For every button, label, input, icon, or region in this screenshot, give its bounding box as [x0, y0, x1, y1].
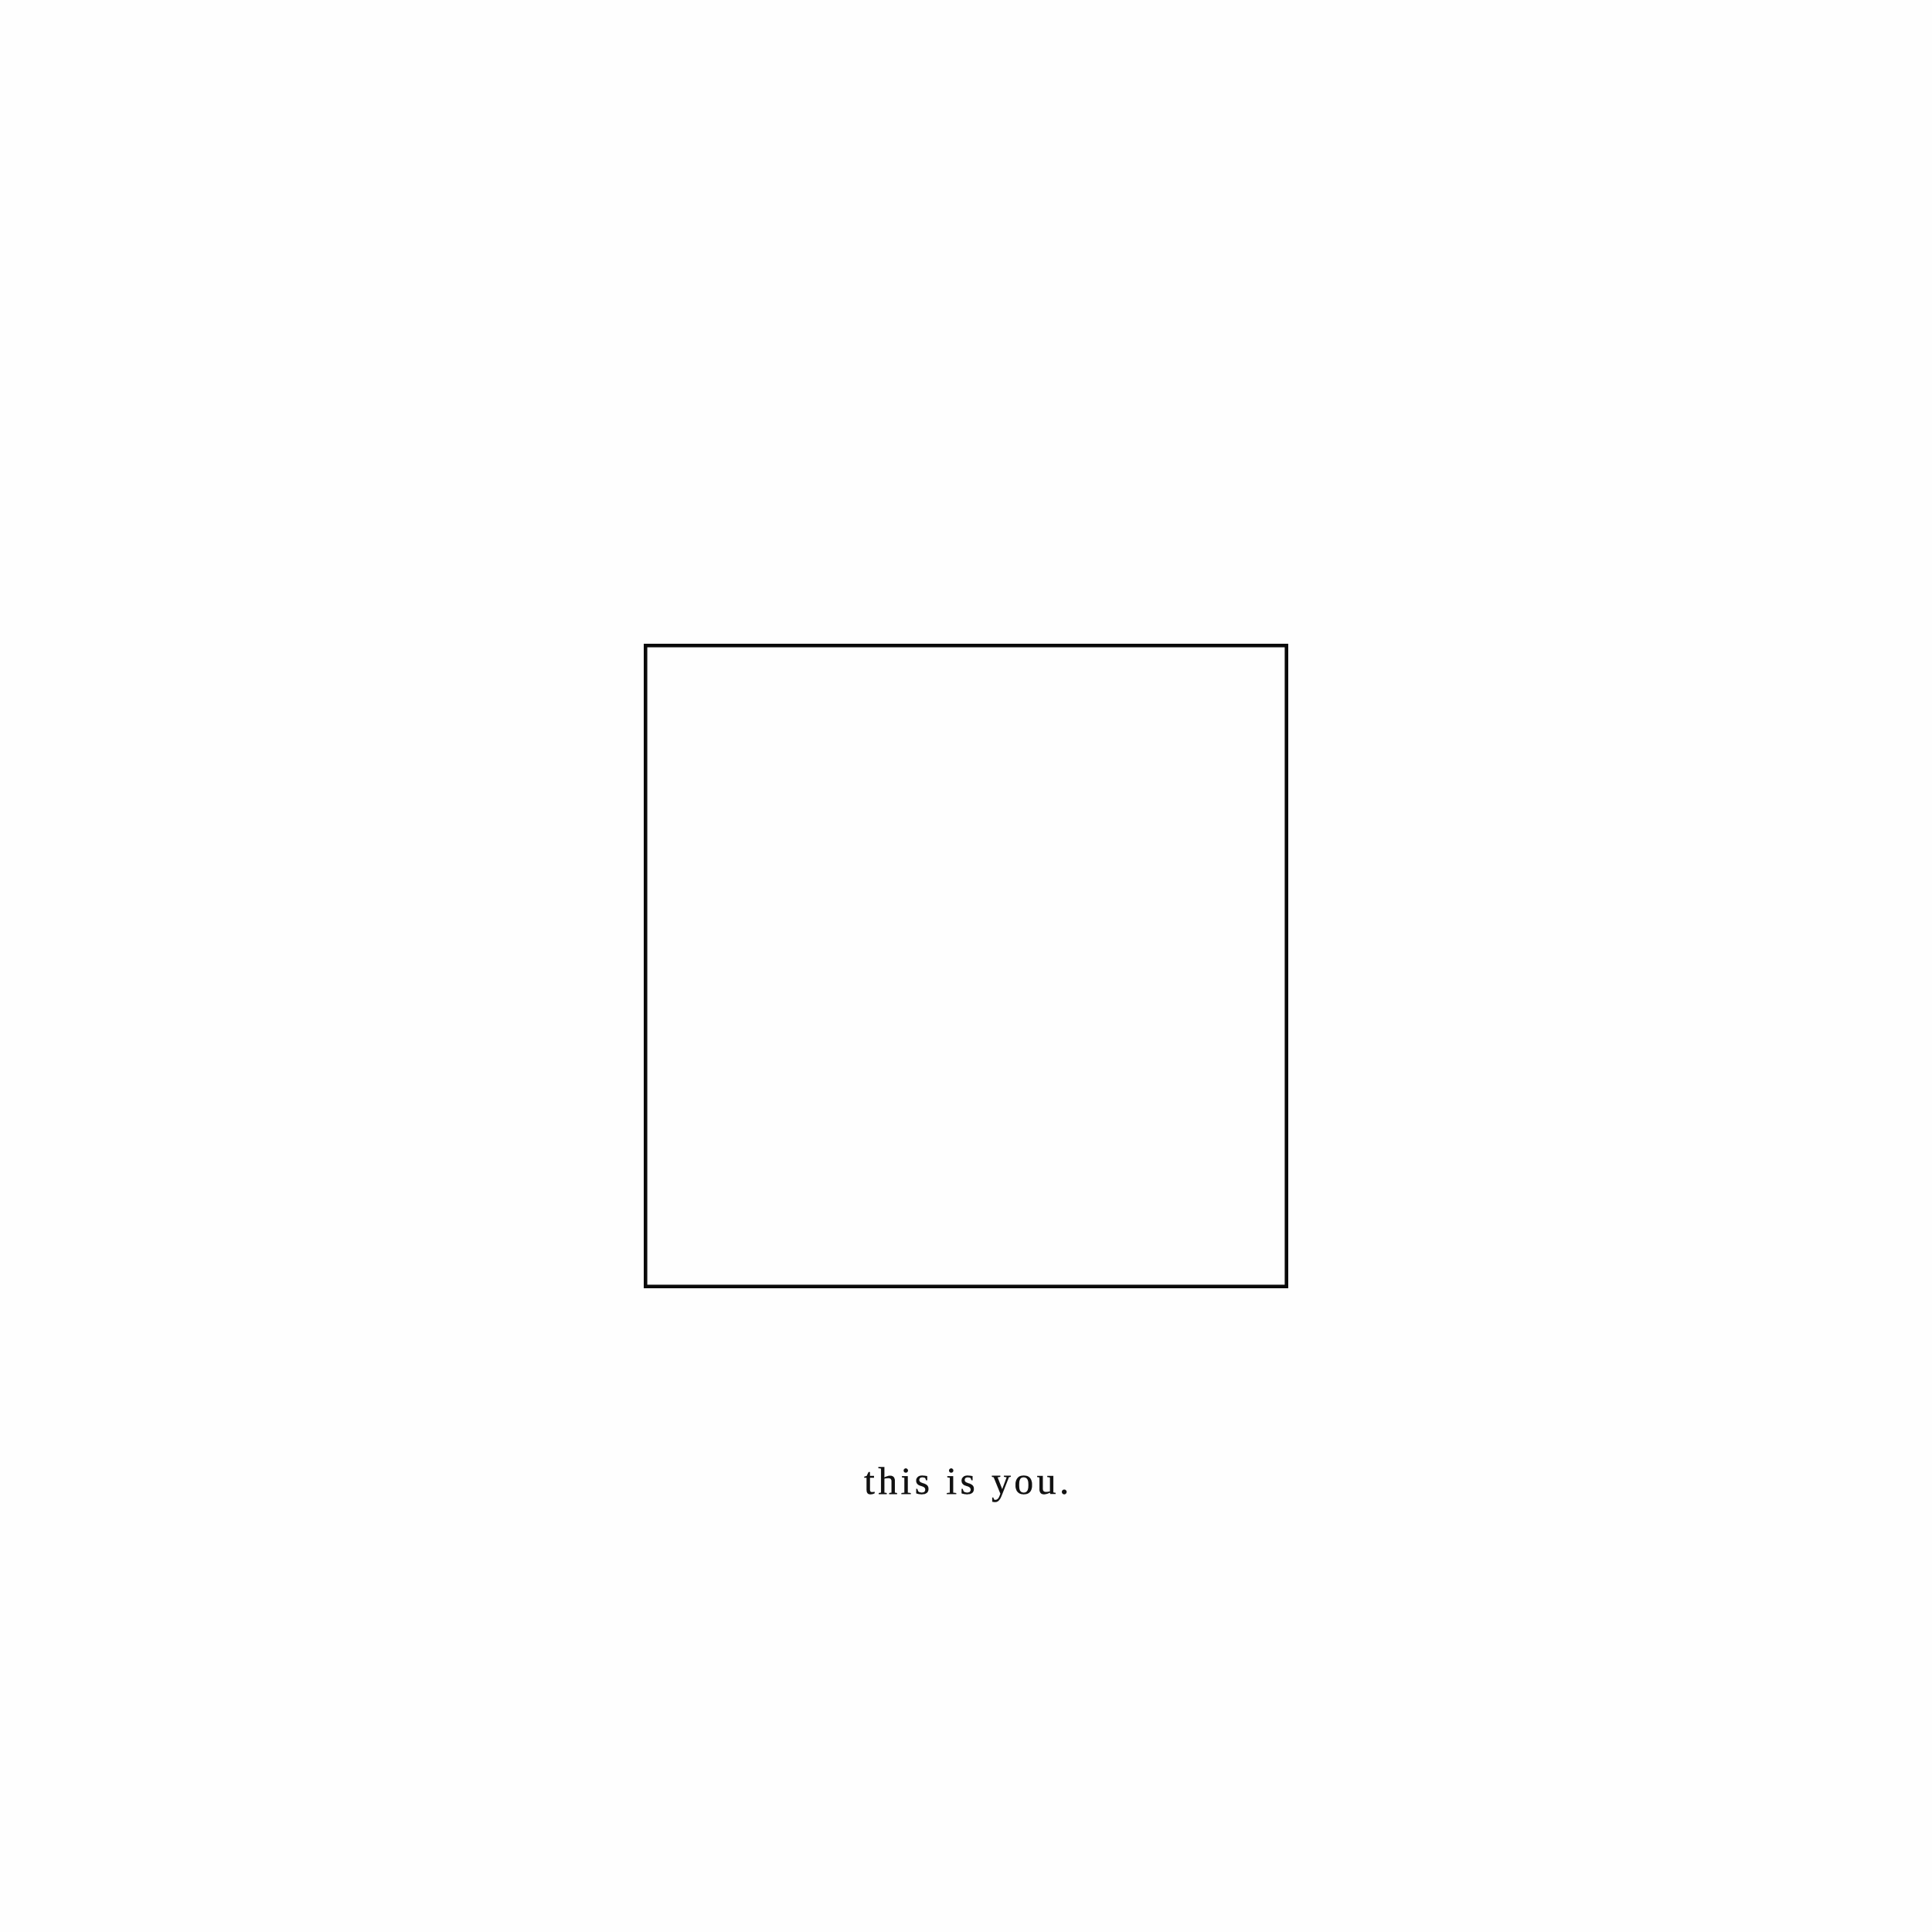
- caption: this is you.: this is you.: [864, 1459, 1073, 1502]
